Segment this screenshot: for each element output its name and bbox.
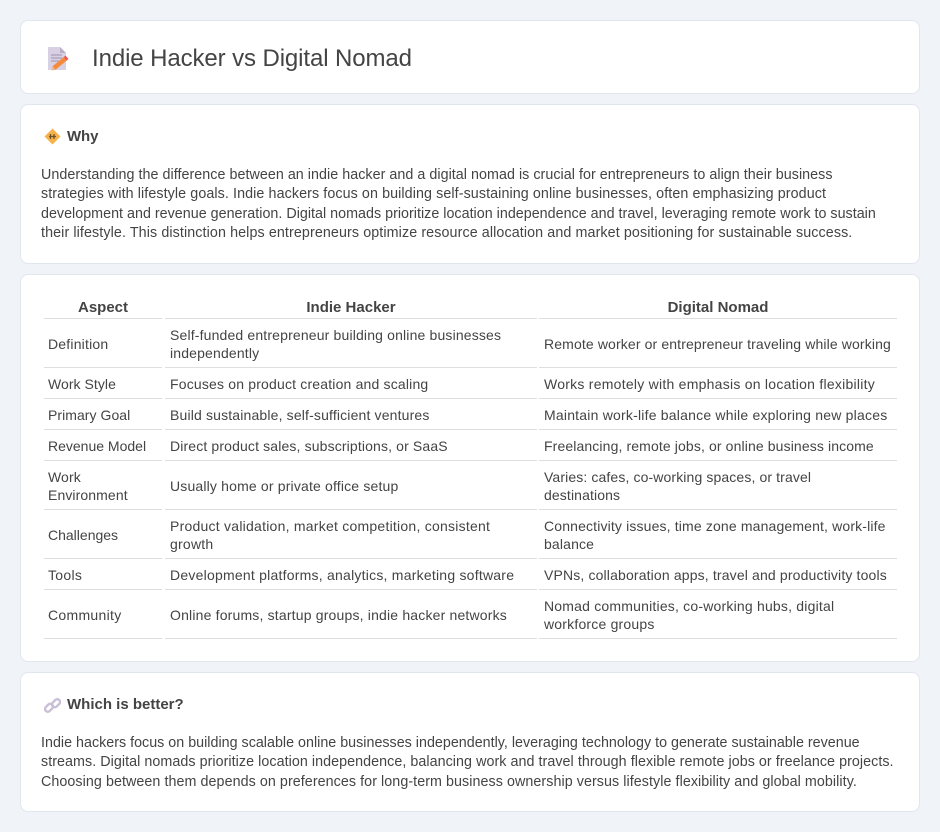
row: definition: independently — [170, 345, 259, 361]
row: tools: Development platforms, analytics, marketing software — [170, 567, 514, 583]
row: primary goal — [48, 407, 887, 423]
text block: why: their lifestyle. This distinction helps entrepreneurs optimize resource allocation and market positioning for sustainable success. — [41, 225, 852, 241]
row: primary goal: Maintain work-life balance while exploring new places — [544, 407, 887, 423]
row: work style — [48, 376, 875, 392]
icon: memo with pencil — [48, 47, 68, 70]
row: primary goal: Primary Goal — [48, 407, 130, 423]
icon: warning diamond — [44, 128, 60, 144]
row: work environment: Varies: cafes, co-working spaces, or travel — [544, 469, 811, 485]
row: revenue model — [48, 438, 874, 454]
row: community: Online forums, startup groups, indie hacker networks — [170, 607, 507, 623]
text block: why: strategies with lifestyle goals. Indie hackers focus on building self-sustaining online businesses, often emphasizing product — [41, 186, 826, 202]
row: work environment: Work — [48, 469, 81, 485]
row: tools: Tools — [48, 567, 82, 583]
row: community: workforce groups — [544, 616, 655, 632]
row: tools — [48, 567, 887, 583]
row: tools: VPNs, collaboration apps, travel and productivity tools — [544, 567, 887, 583]
text block: which is better: Choosing between them depends on preferences for long-term business ownership versus lifestyle flexibility and global mobility. — [41, 774, 857, 790]
heading: which is better: Which is better? — [67, 696, 184, 713]
row: work environment: Usually home or private office setup — [170, 478, 398, 494]
row: work environment: destinations — [544, 487, 620, 503]
text block: which is better: Indie hackers focus on building scalable online businesses independently, leveraging technology to generate sustainable revenue — [41, 734, 860, 750]
row: community: Community — [48, 607, 122, 623]
panel: which is better — [20, 672, 920, 812]
row: definition: Remote worker or entrepreneur traveling while working — [544, 336, 891, 352]
row: community: Nomad communities, co-working hubs, digital — [544, 598, 834, 614]
table header: Aspect — [78, 299, 128, 316]
heading: why: Why — [67, 128, 98, 145]
row: primary goal: Build sustainable, self-sufficient ventures — [170, 407, 430, 423]
text block: why — [41, 166, 876, 241]
row: revenue model: Revenue Model — [48, 438, 146, 454]
row: work style: Work Style — [48, 376, 116, 392]
title: Indie Hacker vs Digital Nomad — [92, 45, 412, 72]
row: definition: Self-funded entrepreneur building online businesses — [170, 327, 501, 343]
row: challenges: growth — [170, 536, 213, 552]
panel: header — [20, 20, 920, 94]
text block: why: Understanding the difference between an indie hacker and a digital nomad is crucial for entrepreneurs to align their business — [41, 166, 833, 182]
row: revenue model: Direct product sales, subscriptions, or SaaS — [170, 438, 448, 454]
row: challenges: balance — [544, 536, 594, 552]
row: revenue model: Freelancing, remote jobs, or online business income — [544, 438, 874, 454]
table header: Digital Nomad — [668, 299, 768, 316]
row: definition — [48, 327, 891, 361]
row: community — [48, 598, 834, 632]
panel: comparison table — [20, 274, 920, 662]
row: work environment — [48, 469, 811, 503]
table header — [78, 299, 768, 316]
row: challenges: Product validation, market competition, consistent — [170, 518, 490, 534]
row: work style: Focuses on product creation and scaling — [170, 376, 428, 392]
text block: which is better — [41, 734, 894, 790]
panel: why — [20, 104, 920, 264]
table header: Indie Hacker — [306, 299, 396, 316]
row: work environment: Environment — [48, 487, 128, 503]
icon: link — [44, 698, 61, 713]
text block: why: development and revenue generation. Digital nomads prioritize location independence and travel, leveraging remote work to sustain — [41, 206, 876, 222]
row: definition: Definition — [48, 336, 108, 352]
row: challenges: Connectivity issues, time zone management, work-life — [544, 518, 886, 534]
row: challenges — [48, 518, 886, 552]
row: challenges: Challenges — [48, 527, 118, 543]
text block: which is better: streams. Digital nomads prioritize location independence, balancing work and travel through flexible remote jobs or freelance projects. — [41, 754, 894, 770]
row: work style: Works remotely with emphasis on location flexibility — [544, 376, 875, 392]
